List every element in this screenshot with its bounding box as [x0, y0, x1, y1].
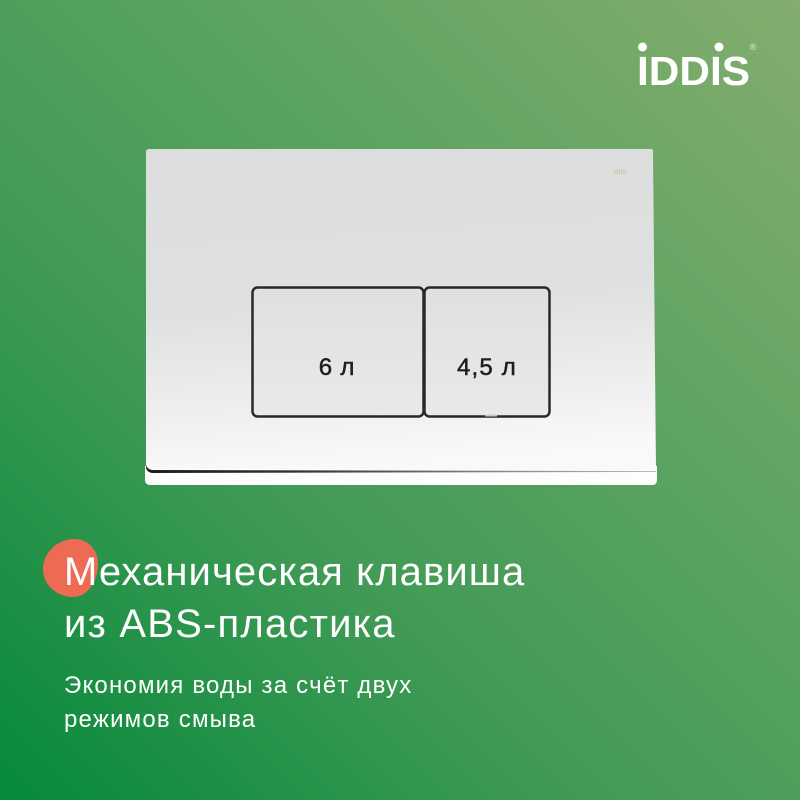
button: 6 l	[252, 288, 424, 416]
button: 4,5 l	[424, 288, 550, 416]
title: из ABS-пластика	[64, 602, 396, 646]
plate bottom strip	[145, 466, 657, 485]
plate lower edge	[146, 465, 656, 473]
small brand mark: iddis	[613, 169, 628, 176]
accent blob	[43, 539, 98, 597]
title	[64, 550, 525, 646]
subtitle: режимов смыва	[64, 706, 256, 733]
plate face	[146, 149, 656, 470]
logo: iddis: ®	[750, 42, 757, 52]
title: Механическая клавиша	[64, 550, 525, 594]
logo: iddis: IDDIS	[637, 48, 750, 94]
button: 4,5 l: 4,5 л	[457, 354, 517, 381]
subtitle	[64, 672, 412, 733]
subtitle: Экономия воды за счёт двух	[64, 672, 412, 699]
panel: flush plate	[145, 149, 657, 485]
button: 6 l: 6 л	[319, 354, 355, 381]
